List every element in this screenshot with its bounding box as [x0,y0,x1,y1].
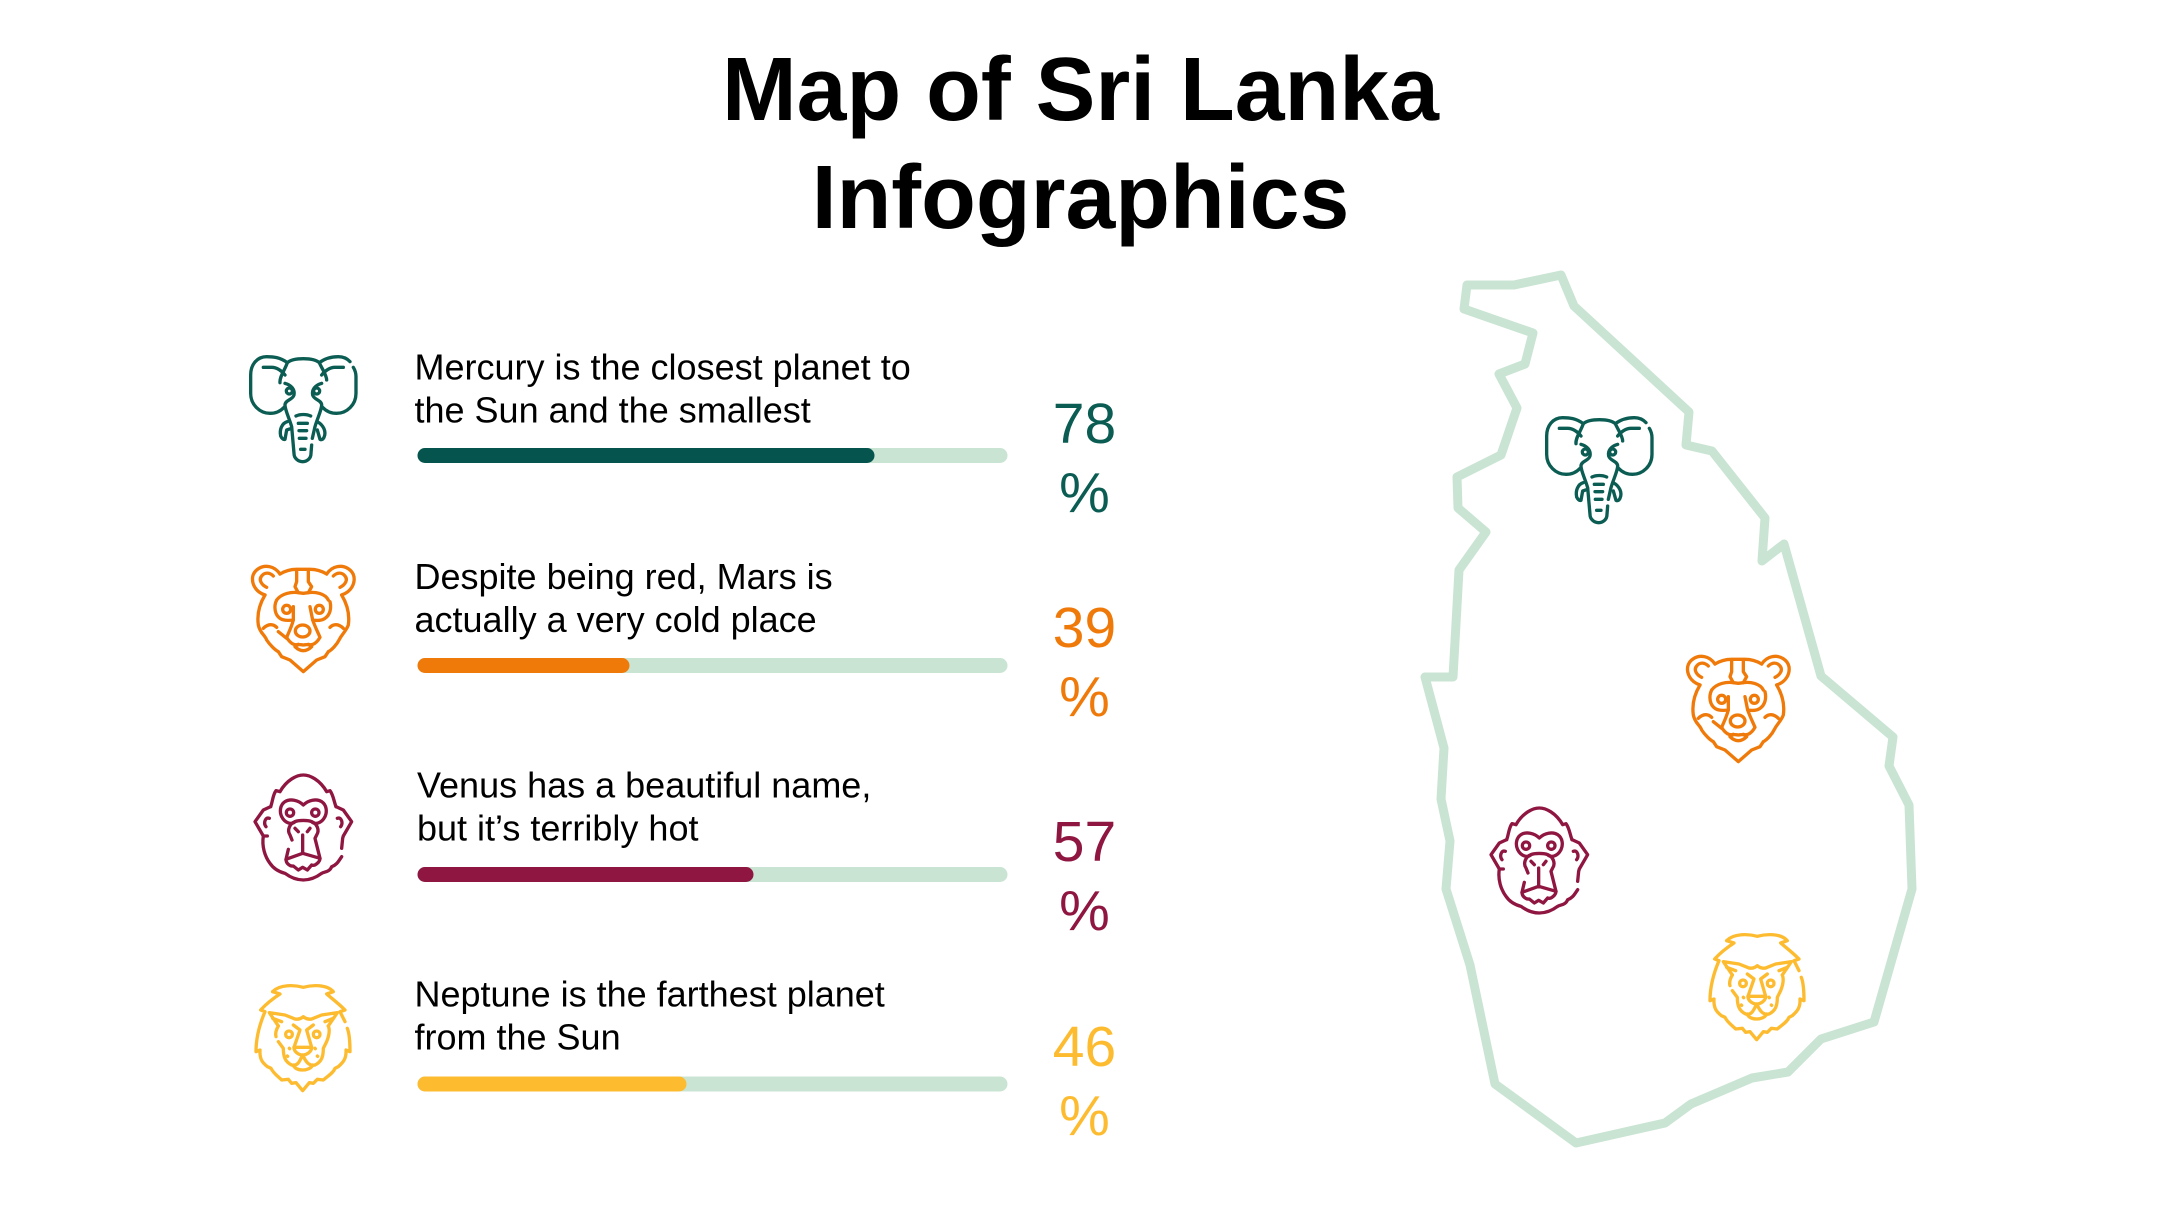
icon: lion [256,986,350,1091]
panel: Venus row [255,764,1116,943]
progress bar: 78 percent [418,448,1008,463]
text: Neptune: from the Sun [414,1016,621,1058]
value: 46 percent: 46 [1053,1015,1116,1079]
progress bar: 46 percent [418,1076,1008,1092]
text: Venus: but it’s terribly hot [417,808,698,848]
text: Mars: Despite being red, Mars is [414,556,833,597]
map: Sri Lanka with animal markers [1425,275,1912,1143]
value: 46 percent [1053,1015,1116,1148]
text: Neptune: Neptune is the farthest planet [414,974,885,1014]
value: 78 percent [1053,392,1116,525]
icon: monkey [255,775,352,880]
panel: Neptune row [256,974,1116,1148]
map icon: monkey [1491,808,1588,913]
value: 57 percent: 57 [1053,810,1116,874]
value: 46 percent: % [1059,1084,1110,1148]
text: Venus: Venus has a beautiful name, [417,764,871,806]
icon: elephant [251,357,356,462]
title: Infographics [812,147,1349,247]
text: Mars: actually a very cold place [414,599,817,640]
title [722,39,1440,247]
map icon: elephant [1547,418,1652,523]
map icon: bear [1687,656,1789,762]
value: 39 percent: 39 [1053,596,1116,660]
value: 78 percent: % [1059,461,1110,525]
panel: Mercury row [251,346,1116,525]
icon: bear [252,566,354,672]
value: 78 percent: 78 [1053,392,1116,456]
text: Mercury [414,346,911,430]
title: Map of Sri Lanka [722,39,1440,139]
map outline [1425,275,1912,1143]
text: Neptune [414,974,885,1058]
progress bar: 57 percent [418,867,1008,882]
value: 57 percent: % [1059,879,1110,943]
value: 39 percent: % [1059,665,1110,729]
text: Mercury: Mercury is the closest planet to [414,346,911,388]
value: 57 percent [1053,810,1116,943]
map icon: lion [1710,935,1804,1040]
text: Mercury: the Sun and the smallest [414,390,811,430]
progress bar: 39 percent [418,658,1008,673]
text: Mars [414,556,833,640]
value: 39 percent [1053,596,1116,729]
panel: Mars row [252,556,1116,729]
text: Venus [417,764,871,848]
